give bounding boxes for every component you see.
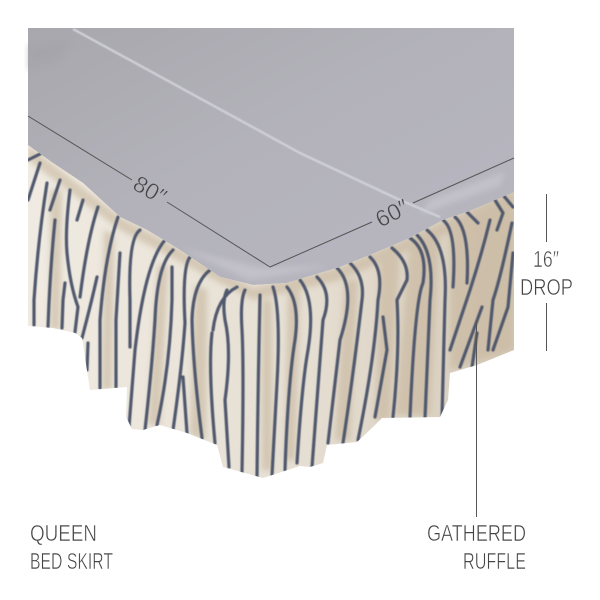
product name: BED SKIRT xyxy=(30,548,113,574)
callout: gathered ruffle: RUFFLE xyxy=(463,548,526,574)
gathered striped skirt xyxy=(28,140,514,485)
dimension: 80 inch: 80″ xyxy=(129,170,171,210)
callout: 16 inch drop: 16″ xyxy=(533,246,559,272)
stripes xyxy=(28,152,513,477)
dimension: 80 inch xyxy=(28,116,270,267)
dimension: 60 inch: 60″ xyxy=(371,194,413,232)
callout: 16 inch drop xyxy=(520,194,573,351)
product name: QUEEN xyxy=(30,520,97,546)
dimension: 60 inch xyxy=(270,158,514,267)
product name xyxy=(30,520,113,574)
callout: gathered ruffle xyxy=(427,320,526,574)
fabric fold shading xyxy=(28,145,514,470)
sheet seam xyxy=(73,29,440,217)
bed sheet top xyxy=(28,28,514,285)
callout: 16 inch drop: DROP xyxy=(520,274,573,300)
callout: gathered ruffle: GATHERED xyxy=(427,520,526,546)
